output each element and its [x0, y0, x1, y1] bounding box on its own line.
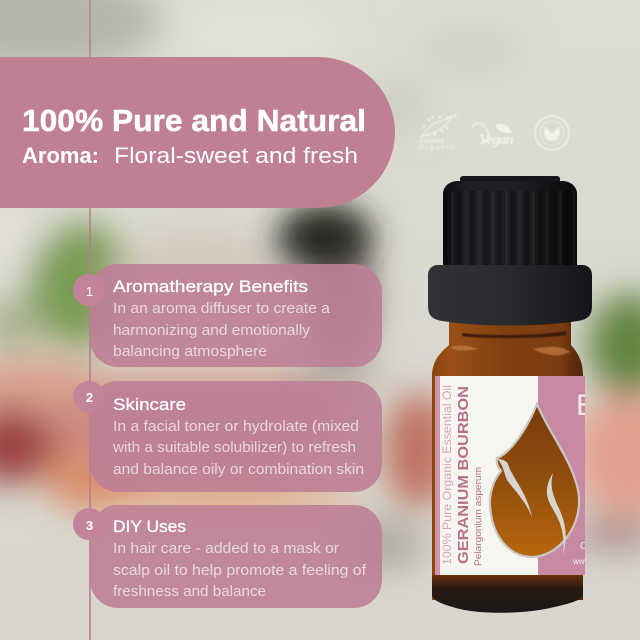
card 2 body: with a suitable solubilizer) to refresh: [112, 440, 356, 456]
step number 3: 3: [86, 518, 93, 533]
label small text: [573, 542, 585, 564]
header panel: [0, 57, 395, 208]
card 2 body: In a facial toner or hydrolate (mixed: [113, 419, 359, 435]
label pink area: [538, 376, 585, 575]
cap ribbed top: [443, 176, 577, 265]
product bottle: [428, 176, 596, 613]
certification badges: [419, 114, 569, 151]
card 3 heading: DIY Uses: [113, 517, 186, 536]
subtitle: Aroma:: [22, 143, 99, 168]
bottle base: [432, 575, 583, 613]
title: 100% Pure and Natural: [22, 103, 366, 138]
icon: oil drop logo: [490, 404, 579, 557]
step number 2: 2: [86, 390, 93, 405]
cap collar: [428, 265, 592, 326]
label product name: GERANIUM BOURBON: [455, 386, 472, 564]
card: DIY uses: [73, 505, 382, 608]
card: aromatherapy benefits: [73, 264, 382, 367]
bottle glass: [432, 322, 583, 600]
card 1 body: In an aroma diffuser to create a: [113, 301, 331, 317]
card 1 body: [113, 301, 331, 360]
icon: vegan badge: [472, 123, 514, 148]
step number 1: 1: [86, 284, 93, 299]
icon: organic leaf badge: [419, 114, 456, 151]
step number 1: [73, 274, 105, 306]
card 3 body: In hair care - added to a mask or: [113, 541, 339, 557]
bottle shoulder highlights: [450, 346, 570, 355]
card 2 body: [112, 419, 364, 478]
label white area: [435, 376, 538, 575]
icon: vegan badge: Vegan: [479, 132, 514, 148]
card 1 body: balancing atmosphere: [113, 344, 267, 360]
icon: cruelty free rabbit badge: [535, 116, 569, 150]
label left stripe: [435, 376, 440, 575]
label small text: C: [580, 541, 587, 552]
step number 3: [73, 508, 105, 540]
label small text: www: [572, 557, 591, 566]
step number 2: [73, 381, 105, 413]
card 1 heading: Aromatherapy Benefits: [113, 277, 308, 296]
label botanical name: Pelargonium asperum: [473, 467, 484, 566]
card 1 body: harmonizing and emotionally: [113, 323, 311, 339]
subtitle: Floral-sweet and fresh: [114, 143, 358, 168]
vertical timeline line: [89, 0, 91, 640]
card 3 body: [113, 541, 367, 600]
card: skincare: [73, 381, 382, 492]
label oil descriptor: 100% Pure Organic Essential Oil: [440, 385, 454, 565]
icon: organic leaf badge: Certified: [419, 139, 444, 145]
icon: organic leaf badge: Organic: [419, 145, 455, 151]
card 2 heading: Skincare: [113, 395, 186, 414]
card 3 body: scalp oil to help promote a feeling of: [113, 563, 367, 579]
card 3 body: freshness and balance: [113, 584, 266, 600]
label brand letter: E: [576, 389, 596, 422]
bottle neck band: [462, 331, 566, 338]
card 2 body: and balance oily or combination skin: [113, 462, 364, 478]
